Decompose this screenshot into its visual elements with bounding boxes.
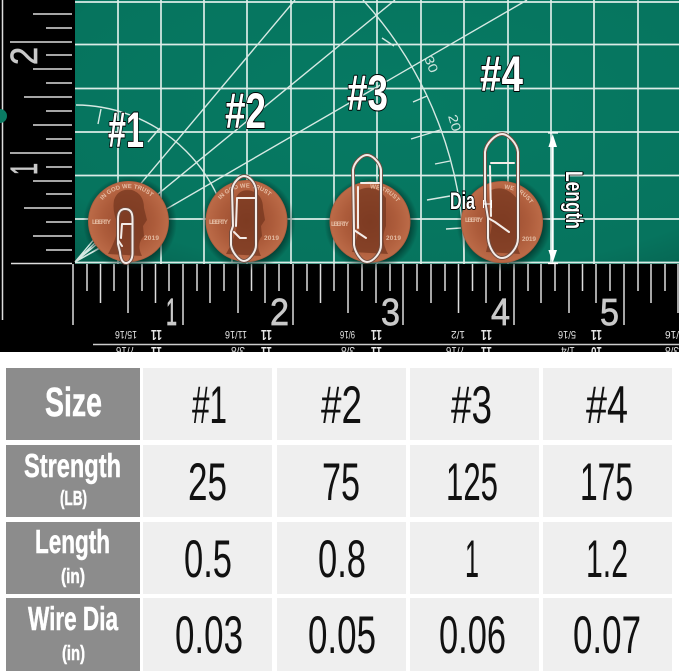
panel: green cutting mat: 20 [445, 113, 464, 133]
bottom ruler ticks and numbers: 1 [166, 292, 177, 334]
penny and clip #3: LIBERTY [331, 221, 350, 228]
table value cells [143, 368, 672, 671]
bottom ruler ticks and numbers: 5 [600, 292, 619, 334]
bottom ruler ticks and numbers: 11 [481, 343, 492, 360]
bottom ruler ticks and numbers: 4 [491, 292, 510, 334]
strength values: 175 [580, 453, 633, 512]
penny and clip #1: 2019 [144, 235, 159, 242]
bottom ruler ticks and numbers: 11 [591, 326, 602, 343]
size values: #4 [586, 376, 628, 435]
label: wire diameter: Dia [450, 188, 475, 215]
bottom ruler ticks and numbers: 11 [261, 343, 272, 360]
penny and clip #3: WE TRUST [370, 184, 400, 201]
length values: 0.8 [318, 530, 366, 589]
penny and clip #4: LIBERTY [465, 217, 484, 224]
header: strength row: Strength [24, 447, 121, 484]
length values: 1.2 [586, 530, 628, 589]
bottom ruler ticks and numbers: 9/16 [340, 328, 355, 340]
bottom ruler ticks and numbers: 1/2 [451, 328, 465, 340]
bottom ruler ticks and numbers: 11 [371, 343, 382, 360]
bottom ruler ticks and numbers: 1/4 [561, 344, 575, 356]
bottom ruler ticks and numbers [73, 264, 679, 360]
penny and clip #2: IN GOD WE TRUST [218, 183, 272, 200]
penny and clip #2: LIBERTY [209, 219, 229, 226]
bottom ruler ticks and numbers: 7/16 [446, 344, 465, 356]
header: length row: Length [35, 523, 110, 560]
penny and clip #2: 2019 [264, 235, 279, 242]
header: wire diameter row: Wire Dia [28, 600, 118, 637]
header: size row [6, 368, 140, 440]
label: #4: #4 [480, 46, 523, 102]
penny and clip #3 [326, 153, 418, 270]
length values: 0.5 [184, 530, 232, 589]
header: wire diameter row: (in) [62, 643, 85, 665]
penny and clip #2 [201, 174, 295, 270]
bottom ruler ticks and numbers: 7/16 [116, 344, 135, 356]
bottom ruler ticks and numbers: 11/16 [225, 328, 247, 340]
bottom ruler ticks and numbers: 15/16 [115, 328, 137, 340]
header: length row: (in) [61, 566, 85, 588]
penny and clip #4: 2019 [522, 236, 536, 243]
bottom ruler ticks and numbers: 3/8 [665, 344, 679, 356]
label: #1: #1 [108, 102, 144, 158]
panel: green cutting mat [75, 0, 679, 264]
strength values: 125 [446, 453, 498, 512]
wire diameter values: 0.07 [573, 606, 641, 665]
bottom ruler ticks and numbers: 11 [371, 326, 382, 343]
bottom ruler ticks and numbers: 10 [591, 343, 602, 360]
bottom ruler ticks and numbers: 5/16 [558, 328, 576, 340]
bottom ruler ticks and numbers: 3/8 [231, 344, 245, 356]
bottom ruler ticks and numbers: 11 [151, 326, 162, 343]
penny and clip #3: 2019 [386, 235, 401, 242]
page: white band under photo [0, 352, 679, 672]
size values: #2 [321, 376, 362, 435]
label: #3: #3 [347, 65, 388, 121]
size values: #3 [451, 376, 492, 435]
strength values: 25 [188, 453, 227, 512]
header: strength row [6, 445, 140, 517]
size values [192, 376, 628, 435]
wire diameter values: 0.06 [439, 606, 506, 665]
header: size row: Size [45, 379, 102, 425]
panel: green cutting mat: 30 [421, 54, 441, 75]
panel: size chart table [6, 368, 672, 671]
strength values: 75 [322, 453, 360, 512]
arrow: length dimension [548, 133, 558, 264]
penny and clip #1: IN GOD WE TRUST [100, 184, 154, 200]
size values: #1 [192, 376, 227, 435]
penny and clip #1 [84, 178, 176, 270]
left ruler ticks and numbers: 2 [4, 47, 46, 65]
left ruler ticks and numbers [0, 0, 72, 320]
bottom ruler ticks and numbers: 2 [270, 292, 289, 334]
bottom ruler ticks and numbers: /16 [665, 328, 679, 340]
bottom ruler ticks and numbers: 3 [381, 292, 400, 334]
bottom ruler ticks and numbers: 11 [151, 343, 162, 360]
header: length row [6, 522, 140, 594]
wire diameter values [175, 606, 641, 665]
penny and clip #1: LIBERTY [92, 219, 112, 226]
photo: black ruler background [0, 0, 679, 352]
penny and clip #4: WE TRUST [504, 184, 534, 203]
bottom ruler ticks and numbers: 3/8 [341, 344, 355, 356]
label: length: Length [560, 171, 587, 229]
header: wire diameter row [6, 598, 140, 671]
label: #2: #2 [225, 83, 266, 139]
penny and clip #4 [457, 132, 551, 271]
wire diameter values: 0.03 [175, 606, 243, 665]
length values: 1 [465, 530, 479, 589]
length values [184, 530, 628, 589]
bottom ruler ticks and numbers: 11 [261, 326, 272, 343]
header: strength row: (LB) [60, 488, 87, 510]
left ruler ticks and numbers: 1 [4, 163, 46, 175]
bottom ruler ticks and numbers: 11 [481, 326, 492, 343]
wire diameter values: 0.05 [308, 606, 376, 665]
strength values [188, 453, 633, 512]
